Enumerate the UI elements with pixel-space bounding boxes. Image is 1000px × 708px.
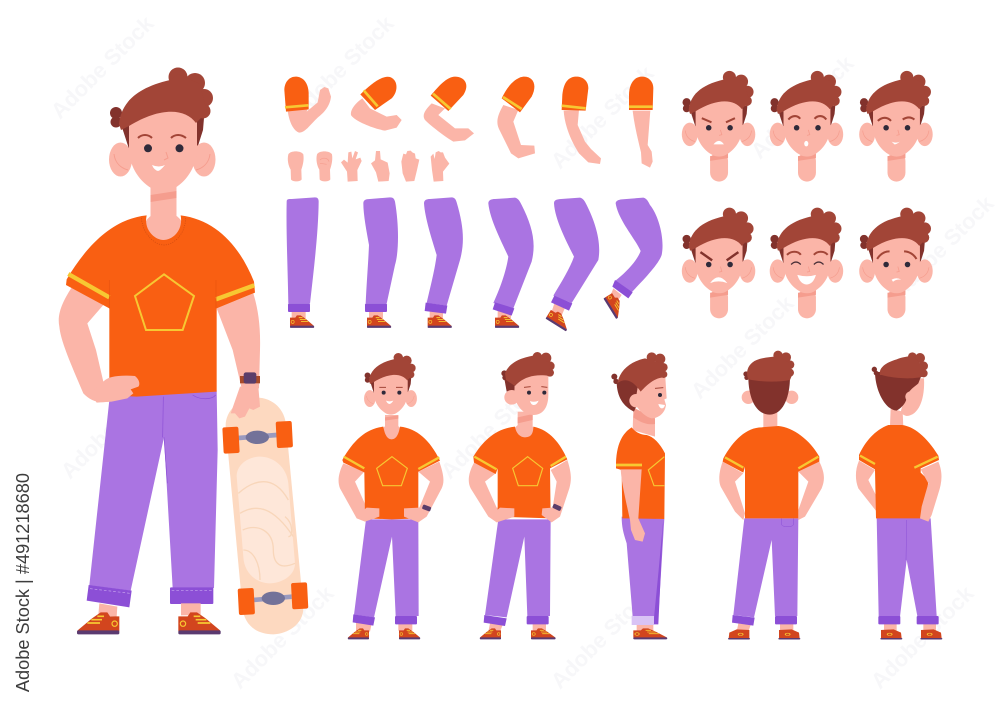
watermark: Adobe Stock <box>286 10 399 124</box>
large boy with skateboard <box>59 68 308 634</box>
front view head <box>364 353 417 415</box>
arm pose 1 <box>284 77 331 133</box>
expression: laughing <box>770 208 843 318</box>
back view head <box>742 351 798 415</box>
side view boy <box>611 352 668 639</box>
back three quarter head <box>872 352 928 416</box>
leg pose 2 <box>363 197 398 328</box>
large boy jeans <box>77 391 221 634</box>
arm pose 2 <box>351 77 402 131</box>
stock id text: Adobe Stock | #491218680 <box>13 473 33 692</box>
leg pose 3 <box>424 197 463 328</box>
watermark: Adobe Stock <box>746 50 859 164</box>
watermark: Adobe Stock <box>866 580 979 694</box>
side view head <box>611 352 668 418</box>
expression: angry <box>682 208 755 318</box>
leg poses <box>287 197 663 331</box>
hand gestures <box>288 151 449 182</box>
three quarter head <box>501 352 555 438</box>
leg pose 1 <box>287 197 319 328</box>
watermark: Adobe Stock <box>56 370 169 484</box>
hand: fist front <box>316 151 332 181</box>
back view boy <box>719 351 824 639</box>
front view boy <box>339 353 443 639</box>
large boy t-shirt <box>66 215 255 397</box>
watermark: Adobe Stock <box>546 580 659 694</box>
hand: back of hand <box>431 151 449 182</box>
leg pose 4 <box>488 198 534 328</box>
large boy hand on hip and watch <box>90 372 260 418</box>
watermark: Adobe Stock <box>546 60 659 174</box>
leg pose 5 <box>545 198 599 331</box>
hand: pointing finger <box>371 151 390 182</box>
arm poses <box>284 77 653 168</box>
large boy left arm <box>59 285 137 402</box>
watermark: Adobe Stock <box>226 580 339 694</box>
arm pose 3 <box>424 77 474 142</box>
front view body <box>339 415 443 639</box>
three quarter view boy <box>469 352 571 639</box>
side view body <box>616 408 667 639</box>
arm pose 4 <box>497 77 535 158</box>
facial expressions <box>682 71 933 318</box>
expression: sad <box>859 208 933 318</box>
hand: three fingers <box>341 151 362 182</box>
back view body <box>719 412 824 639</box>
large boy right arm <box>217 293 260 388</box>
arm pose 5 <box>562 77 601 164</box>
large boy head <box>109 68 216 245</box>
watermark: Adobe Stock <box>436 370 549 484</box>
back three quarter view boy <box>856 352 942 639</box>
watermark: Adobe Stock <box>686 290 799 404</box>
watermark: Adobe Stock <box>886 190 999 304</box>
expression: annoyed <box>682 71 755 182</box>
back three quarter body <box>856 408 942 639</box>
expression: neutral <box>859 71 933 182</box>
hand: closed fist <box>288 151 304 181</box>
watermark: Adobe Stock <box>46 10 159 124</box>
skateboard <box>222 398 308 634</box>
hand: open palm <box>401 151 419 182</box>
front view face <box>379 387 403 404</box>
large boy neck base <box>144 212 183 243</box>
leg pose 6 <box>603 198 663 319</box>
three quarter body <box>469 427 571 639</box>
arm pose 6 <box>629 77 653 168</box>
expression: surprised <box>770 71 843 182</box>
